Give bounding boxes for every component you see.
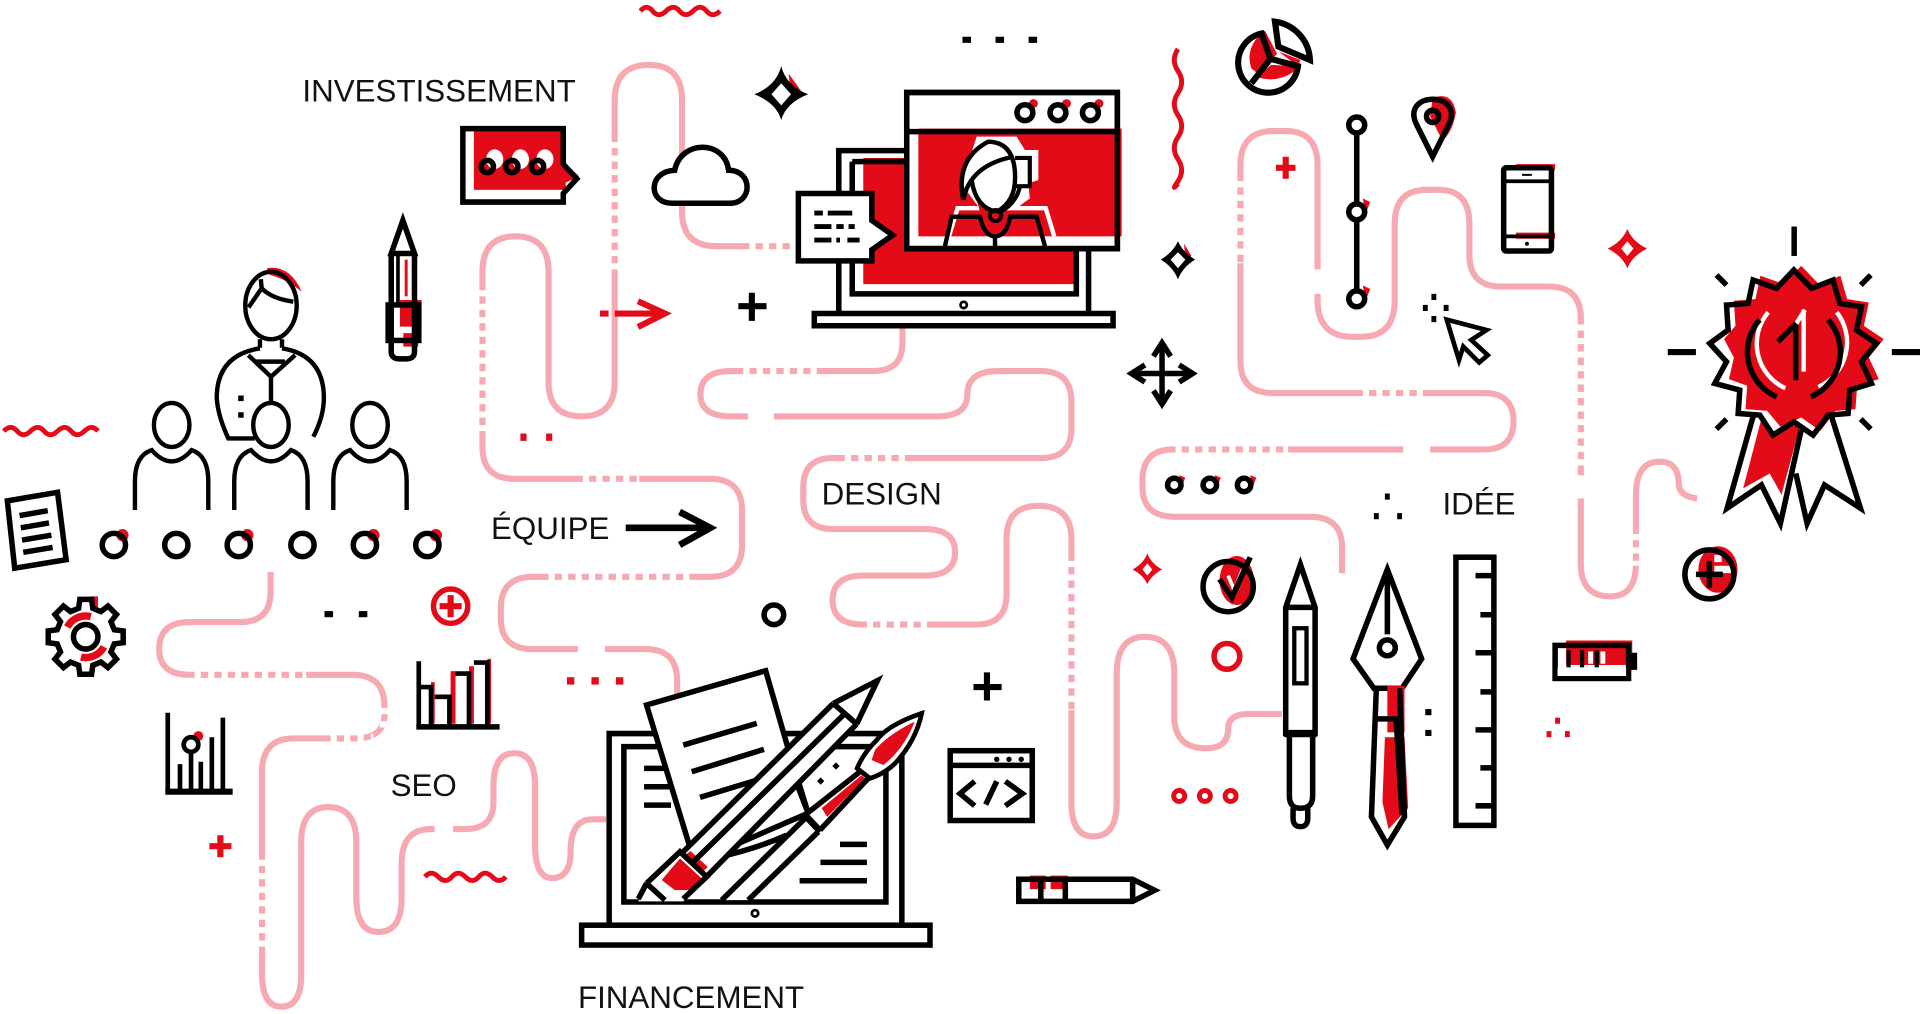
- team of people: [135, 268, 407, 510]
- icon: document: [7, 492, 66, 568]
- heading: idée: IDÉE: [1442, 486, 1516, 521]
- icon: red sparkle lower: [1133, 554, 1162, 584]
- bar chart: upper: [416, 659, 500, 727]
- icon: battery: [1555, 640, 1637, 678]
- pink route: investissement to financement: [482, 65, 796, 698]
- laptop with video call: [798, 92, 1122, 326]
- red wave: left: [4, 427, 98, 435]
- rays: [1668, 227, 1920, 429]
- lead person: [217, 268, 324, 438]
- arrow: équipe: [626, 512, 710, 545]
- heading: seo: SEO: [391, 768, 457, 803]
- red plus: upper: [1276, 157, 1296, 179]
- icon: horizontal pencil: [1019, 876, 1155, 901]
- icon: pie chart: [1238, 22, 1310, 93]
- heading: investissement: INVESTISSEMENT: [302, 74, 576, 109]
- heading: financement: FINANCEMENT: [578, 980, 804, 1014]
- icon: map pin: [1414, 96, 1456, 157]
- pencil: [638, 681, 877, 901]
- paper sheet: [647, 671, 808, 856]
- top dots: [962, 37, 1037, 43]
- icon: gear: [48, 596, 123, 674]
- row of three black circles: [1168, 475, 1256, 492]
- icon: red ring: [1214, 644, 1240, 669]
- icon: marker pen: [1284, 565, 1316, 827]
- icon: cloud: [654, 147, 747, 203]
- pink route: laptop to pen: [700, 328, 1282, 836]
- icon: plus lower: [973, 672, 1002, 700]
- icon: small pencil: [388, 220, 422, 359]
- red dots centre: [567, 677, 623, 685]
- icon: red sparkle upper: [1608, 229, 1647, 268]
- chat bubble: [798, 193, 902, 261]
- black dots: [324, 611, 367, 617]
- heading: design: DESIGN: [822, 477, 942, 512]
- person left: [135, 403, 208, 510]
- ribbons: [1727, 416, 1860, 523]
- rosette star: [1710, 266, 1884, 435]
- row of circles: [102, 529, 442, 557]
- laptop with design tools: [582, 671, 930, 945]
- icon: plus circle right: [1685, 546, 1738, 599]
- icon: ruler: [1456, 557, 1494, 825]
- paint brush: [721, 713, 922, 900]
- person centre: [234, 402, 308, 510]
- award rosette: [1668, 227, 1920, 523]
- red triad: [1547, 718, 1570, 737]
- pink route: team to seo: [159, 572, 606, 1007]
- red wave: vertical: [1174, 49, 1182, 187]
- headset operator: [945, 137, 1054, 246]
- icon: code window: [950, 751, 1032, 821]
- red rings: [1174, 791, 1236, 802]
- red wave: bottom: [425, 873, 506, 881]
- icon: check circle: [1203, 556, 1254, 612]
- icon: smartphone: [1504, 164, 1555, 251]
- arrow: red: [600, 301, 665, 327]
- red plus: left: [209, 835, 231, 857]
- icon: red plus circle: [433, 589, 468, 623]
- black triad: [1374, 494, 1402, 519]
- icon: slider: [1349, 117, 1370, 307]
- person right: [333, 403, 407, 510]
- monitor window: [907, 92, 1122, 249]
- icon: black sparkle: [754, 66, 808, 120]
- icon: move arrows: [1131, 343, 1193, 404]
- speech bubble: investissement: [463, 126, 579, 202]
- red wave: top: [640, 7, 720, 15]
- icon: cursor with click marks: [1423, 294, 1488, 362]
- icon: fountain pen nib: [1353, 569, 1422, 845]
- heading: équipe: ÉQUIPE: [491, 511, 609, 546]
- pink route: idea to award: [1142, 131, 1697, 596]
- icon: plus: [738, 293, 767, 321]
- dots near nib: [1425, 709, 1431, 736]
- icon: small sparkle: [1161, 241, 1195, 279]
- bar chart: lower: [165, 713, 233, 792]
- number one mark: [1747, 310, 1847, 397]
- red dots left: [520, 434, 552, 441]
- icon: ring: [764, 605, 784, 625]
